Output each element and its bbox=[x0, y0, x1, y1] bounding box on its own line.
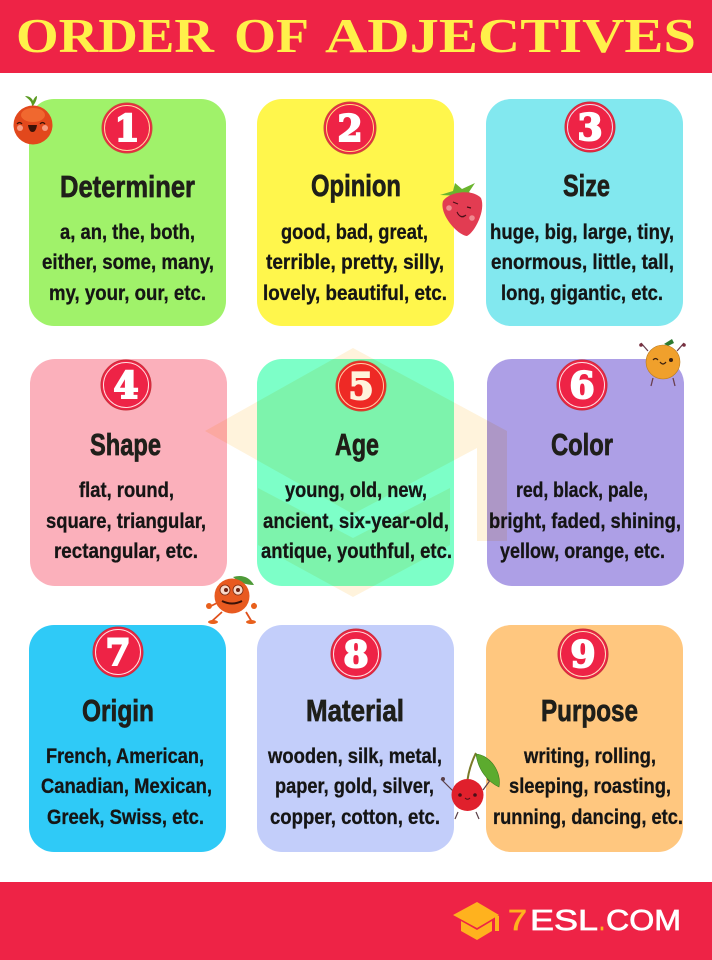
panel: origin bbox=[29, 625, 226, 852]
panel: age: Age bbox=[335, 427, 379, 462]
panel: purpose: running, dancing, etc. bbox=[493, 806, 683, 829]
panel: material: Material bbox=[306, 693, 404, 728]
panel: origin: Origin bbox=[82, 693, 154, 728]
panel: age bbox=[257, 359, 454, 586]
panel: shape: flat, round, bbox=[79, 479, 174, 502]
panel: opinion: lovely, beautiful, etc. bbox=[263, 282, 447, 305]
icon: orange character bbox=[206, 576, 257, 624]
panel: purpose: sleeping, roasting, bbox=[509, 775, 671, 798]
panel: origin: Greek, Swiss, etc. bbox=[47, 806, 204, 829]
watermark: graduation cap bbox=[205, 348, 507, 597]
panel: opinion: terrible, pretty, silly, bbox=[266, 251, 444, 274]
panel: purpose: writing, rolling, bbox=[523, 745, 656, 768]
panel: material bbox=[257, 625, 454, 852]
panel: size bbox=[486, 99, 683, 326]
panel: opinion bbox=[257, 99, 454, 326]
panel: size: huge, big, large, tiny, bbox=[490, 221, 674, 244]
title banner: OF bbox=[234, 8, 309, 63]
icon: logo graduation cap bbox=[453, 902, 499, 940]
icon: smiling strawberry bbox=[440, 183, 482, 236]
panel: determiner: a, an, the, both, bbox=[60, 221, 195, 244]
panel: size: 3 bbox=[577, 107, 603, 149]
panel: size: enormous, little, tall, bbox=[491, 251, 674, 274]
icon: cherry with leaf bbox=[441, 753, 499, 819]
panel: age: ancient, six-year-old, bbox=[263, 510, 449, 533]
panel: material: copper, cotton, etc. bbox=[270, 806, 440, 829]
panel: shape bbox=[30, 359, 227, 586]
panel: shape: square, triangular, bbox=[46, 510, 206, 533]
panel: shape: rectangular, etc. bbox=[54, 540, 198, 563]
footer banner bbox=[0, 882, 712, 960]
panel: shape: 4 bbox=[113, 365, 139, 407]
panel: origin: French, American, bbox=[46, 745, 204, 768]
icon: smiling tomato bbox=[14, 96, 52, 144]
panel: opinion: 2 bbox=[337, 108, 363, 150]
panel: size: long, gigantic, etc. bbox=[501, 282, 663, 305]
panel: determiner: my, your, our, etc. bbox=[49, 282, 206, 305]
panel: determiner: 1 bbox=[114, 108, 140, 150]
panel: age: 5 bbox=[348, 366, 374, 408]
panel: opinion: good, bad, great, bbox=[281, 221, 428, 244]
title banner bbox=[0, 0, 712, 73]
icon: smiling orange bbox=[639, 339, 686, 386]
panel: age: antique, youthful, etc. bbox=[261, 540, 452, 563]
panel: color: 6 bbox=[569, 365, 595, 407]
panel: determiner bbox=[29, 99, 226, 326]
panel: material: 8 bbox=[343, 634, 369, 676]
panel: color: Color bbox=[551, 427, 613, 462]
title banner: ORDER bbox=[16, 8, 215, 63]
panel: origin: 7 bbox=[105, 632, 131, 674]
panel: determiner: Determiner bbox=[60, 169, 195, 204]
panel: material: wooden, silk, metal, bbox=[267, 745, 442, 768]
panel: age: young, old, new, bbox=[285, 479, 427, 502]
panel: material: paper, gold, silver, bbox=[275, 775, 434, 798]
panel: origin: Canadian, Mexican, bbox=[41, 775, 212, 798]
panel: purpose: 9 bbox=[570, 634, 596, 676]
panel: color: yellow, orange, etc. bbox=[500, 540, 665, 563]
logo wordmark bbox=[508, 905, 681, 937]
panel: purpose bbox=[486, 625, 683, 852]
panel: determiner: either, some, many, bbox=[42, 251, 214, 274]
panel: color bbox=[487, 359, 684, 586]
panel: opinion: Opinion bbox=[311, 168, 401, 203]
logo wordmark: ESL bbox=[530, 905, 598, 937]
panel: size: Size bbox=[563, 168, 610, 203]
panel: color: bright, faded, shining, bbox=[489, 510, 681, 533]
title banner: ADJECTIVES bbox=[325, 8, 696, 63]
panel: shape: Shape bbox=[90, 427, 161, 462]
logo wordmark: 7 bbox=[508, 905, 527, 937]
logo wordmark: . bbox=[599, 905, 605, 937]
logo wordmark: COM bbox=[606, 905, 681, 937]
panel: color: red, black, pale, bbox=[516, 479, 648, 502]
panel: purpose: Purpose bbox=[541, 693, 638, 728]
